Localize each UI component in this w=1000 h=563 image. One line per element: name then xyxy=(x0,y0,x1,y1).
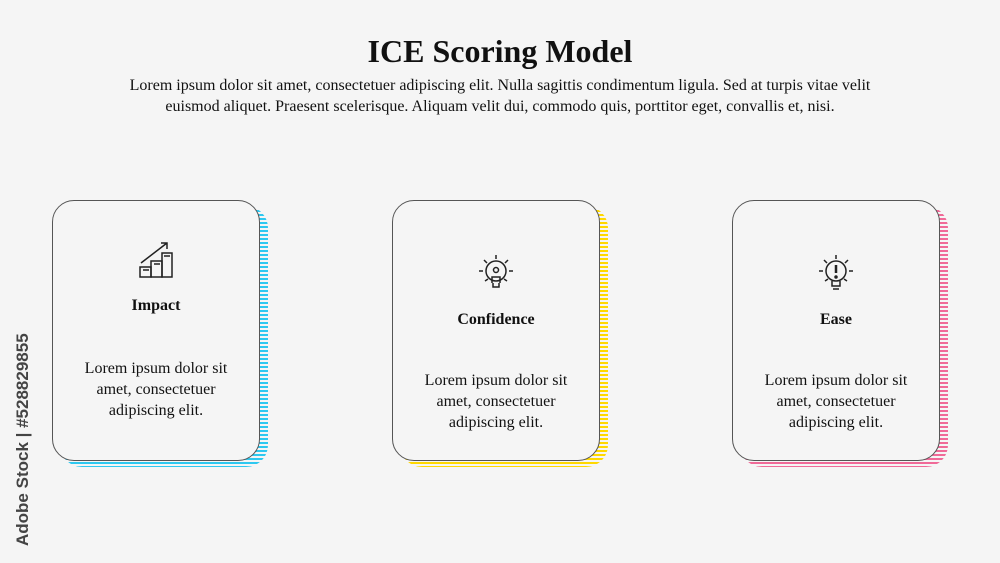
panel: ease xyxy=(732,200,948,467)
heading: Confidence xyxy=(457,311,535,328)
panel: confidence xyxy=(392,200,608,467)
icon: bulb person xyxy=(479,255,513,288)
text: Lorem ipsum dolor sit amet, consectetuer adipiscing elit. xyxy=(765,372,907,431)
text: Lorem ipsum dolor sit amet, consectetuer adipiscing elit. xyxy=(85,360,227,419)
heading: Impact xyxy=(132,297,180,314)
heading: Ease xyxy=(820,311,852,328)
text: Lorem ipsum dolor sit amet, consectetuer adipiscing elit. xyxy=(425,372,567,431)
title: ICE Scoring Model xyxy=(368,33,632,69)
panel: impact xyxy=(52,200,268,467)
subtitle: Lorem ipsum dolor sit amet, consectetuer adipiscing elit. Nulla sagittis condimentum ligula. Sed at turpis vitae velit euismod aliquet. Praesent scelerisque. Aliquam velit dui, commodo quis, porttitor eget, convallis et, nisi. xyxy=(130,77,870,115)
icon: bulb exclamation xyxy=(819,255,853,290)
watermark: Adobe Stock | #528829855 xyxy=(13,333,32,546)
icon: bar chart arrow xyxy=(139,242,173,278)
